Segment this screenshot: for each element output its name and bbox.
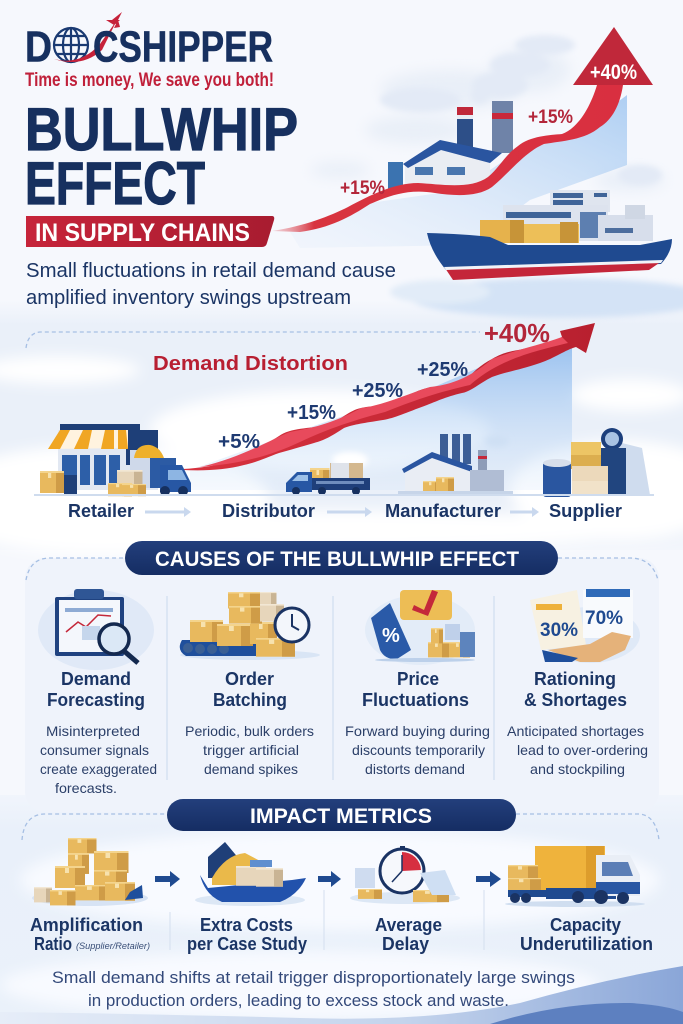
percent label +25% upper: +25%: [417, 359, 468, 381]
text: rationing and shortages: and stockpiling: [530, 761, 625, 777]
icon: cost tray with coins and boxes: [195, 842, 306, 906]
hero cargo ship: [427, 190, 672, 280]
arrow retailer to distributor: [145, 507, 191, 517]
icon: cargo truck: [505, 846, 645, 907]
logo: [25, 12, 273, 72]
causes heading pill: CAUSES OF THE BULLWHIP EFFECT: [155, 548, 519, 571]
baseline strip: [34, 494, 654, 496]
title: [25, 96, 298, 217]
impact heading pill: [167, 799, 516, 831]
heading: demand forecasting: [47, 669, 145, 710]
heading: demand distortion: Demand Distortion: [153, 353, 348, 375]
title: EFFECT: [25, 150, 205, 217]
text: order batching: trigger artificial: [203, 742, 299, 758]
retailer shop icon: [40, 424, 191, 496]
area under demand curve: [190, 345, 572, 490]
supplier goods icon: [543, 428, 650, 497]
hero +15% lower label: +15%: [340, 178, 385, 199]
text: price fluctuations: Forward buying during: [345, 723, 490, 739]
stage label manufacturer: Manufacturer: [385, 501, 501, 521]
title: BULLWHIP: [25, 96, 298, 163]
text: order batching: Periodic, bulk orders: [185, 723, 314, 739]
manufacturer factory icon: [398, 434, 513, 494]
arrow between metrics 1: [155, 871, 180, 887]
heading: demand forecasting: Forecasting: [47, 690, 145, 710]
text: rationing and shortages: [507, 723, 648, 777]
text: demand forecasting: forecasts.: [55, 780, 117, 796]
arrow distributor to manufacturer: [327, 507, 372, 517]
hero +15% upper label: +15%: [528, 107, 573, 128]
impact heading pill: IMPACT METRICS: [250, 805, 432, 828]
intro text: Small fluctuations in retail demand cause: [26, 260, 396, 282]
text: price fluctuations: discounts temporarily: [352, 742, 485, 758]
hero smoke clouds: [380, 35, 662, 185]
logo globe: [54, 28, 88, 62]
arrow manufacturer to supplier: [510, 507, 539, 517]
icon: price tags and stock: [365, 590, 475, 665]
footer note: in production orders, leading to excess stock and waste.: [88, 991, 509, 1010]
panel: impact metrics: [22, 799, 659, 954]
text: price fluctuations: distorts demand: [365, 761, 465, 777]
percent label +5%: +5%: [218, 431, 260, 453]
metric label: extra costs: Extra Costs: [200, 915, 293, 935]
metric label: amplification ratio: [30, 915, 150, 954]
metric label: capacity underutilization: Underutilization: [520, 934, 653, 954]
panel: causes: [25, 541, 659, 812]
text: demand forecasting: [40, 723, 157, 796]
metric label: average delay: [375, 915, 442, 954]
heading: rationing and shortages: & Shortages: [524, 690, 627, 710]
text: order batching: demand spikes: [204, 761, 298, 777]
metric label: average delay: Delay: [382, 934, 429, 954]
heading: demand forecasting: Demand: [61, 669, 131, 689]
heading: rationing and shortages: Rationing: [534, 669, 616, 689]
metric label: amplification ratio: (Supplier/Retailer): [76, 941, 150, 951]
heading: order batching: [213, 669, 287, 710]
percent label +15%: +15%: [287, 402, 336, 424]
heading: price fluctuations: Fluctuations: [362, 690, 469, 710]
icon: rationing 30 / 70 cards with hand: [530, 589, 640, 663]
hero ship water: [390, 278, 683, 318]
icon: rationing 30 / 70 cards with hand: 70%: [585, 608, 623, 629]
tagline: Time is money, We save you both!: [25, 70, 274, 91]
logo wordmark: D: [25, 22, 52, 72]
metric label: capacity underutilization: Capacity: [550, 915, 621, 935]
dashed frame: demand distortion: [26, 332, 480, 348]
metric label: extra costs: per Case Study: [187, 934, 307, 954]
metric label: capacity underutilization: [520, 915, 653, 954]
icon: price tags and stock: %: [382, 625, 400, 647]
metric label: amplification ratio: Ratio: [34, 934, 72, 954]
text: rationing and shortages: lead to over-ordering: [517, 742, 648, 758]
heading: price fluctuations: [362, 669, 469, 710]
intro text: amplified inventory swings upstream: [26, 287, 351, 309]
logo swoosh and plane: [54, 12, 122, 62]
distributor truck icon: [286, 452, 370, 495]
percent label +40%: +40%: [484, 318, 550, 348]
causes heading pill: [125, 541, 558, 575]
hero red growth arrow: [272, 27, 653, 232]
text: order batching: [185, 723, 314, 777]
intro text: [26, 260, 396, 309]
text: price fluctuations: [345, 723, 490, 777]
stage label supplier: Supplier: [549, 501, 622, 521]
icon: stacked boxes: [32, 838, 148, 906]
heading: order batching: Order: [225, 669, 274, 689]
hero factory: [388, 101, 513, 191]
icon: stopwatch with parcels: [350, 846, 460, 904]
icon: order batching boxes on conveyor: [180, 592, 320, 660]
text: demand forecasting: create exaggerated: [40, 761, 157, 777]
icon: rationing 30 / 70 cards with hand: 30%: [540, 620, 578, 641]
icon: demand forecasting clipboard: [38, 589, 154, 670]
hero +40% label: +40%: [590, 61, 637, 84]
stage label distributor: Distributor: [222, 501, 315, 521]
arrow between metrics 2: [318, 871, 341, 887]
demand distortion red arrow: [183, 323, 595, 470]
footer note: Small demand shifts at retail trigger disproportionately large swings: [52, 968, 575, 987]
text: rationing and shortages: Anticipated shortages: [507, 723, 644, 739]
hero rising area: [290, 95, 627, 248]
heading: order batching: Batching: [213, 690, 287, 710]
heading: rationing and shortages: [524, 669, 627, 710]
metric label: average delay: Average: [375, 915, 442, 935]
metric label: extra costs: [187, 915, 307, 954]
heading: price fluctuations: Price: [397, 669, 439, 689]
text: demand forecasting: consumer signals: [40, 742, 149, 758]
text: demand forecasting: Misinterpreted: [46, 723, 140, 739]
stage label retailer: Retailer: [68, 501, 134, 521]
percent label +25% lower: +25%: [352, 380, 403, 402]
footer note: [52, 968, 575, 1010]
metric label: amplification ratio: Amplification: [30, 915, 143, 935]
subtitle banner: IN SUPPLY CHAINS: [35, 219, 250, 247]
logo wordmark rest: CSHIPPER: [93, 22, 273, 72]
arrow between metrics 3: [476, 871, 501, 887]
